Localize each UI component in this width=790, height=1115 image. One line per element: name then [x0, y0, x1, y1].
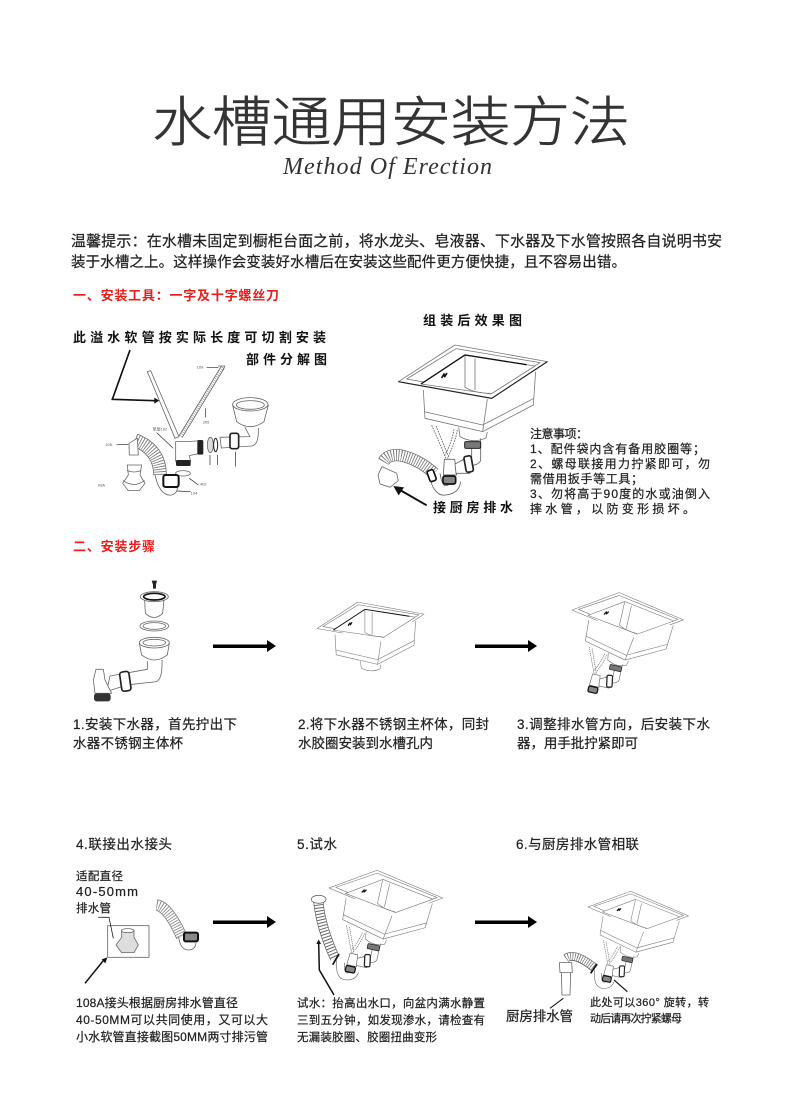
intro text [71, 233, 722, 271]
notes: 注意事项： [530, 426, 588, 441]
panel: parts diagram: 402 [200, 481, 207, 486]
notes: 3、勿将高于90度的水或油倒入 [530, 486, 710, 501]
panel: step 6 kitchen connection: 此处可以360° 旋转，转 [590, 995, 709, 1009]
icon: step 2 sink [317, 602, 424, 671]
panel: parts diagram: 109 [197, 365, 204, 370]
panel: step 6 kitchen connection [506, 883, 709, 1025]
panel: step 6 kitchen connection: 厨房排水管 [506, 1009, 573, 1024]
notes: 1、配件袋内含有备用胶圈等； [530, 441, 705, 456]
notes: 2、螺母联接用力拧紧即可，勿 [530, 456, 710, 471]
step 3 text: 3.调整排水管方向，后安装下水 [517, 717, 710, 732]
panel: step 6 kitchen connection: 动后请再次拧紧螺母 [590, 1011, 682, 1025]
intro text: 温馨提示：在水槽未固定到橱柜台面之前，将水龙头、皂液器、下水器及下水管按照各自说明书安 [71, 233, 722, 250]
step 4 text: 108A接头根据厨房排水管直径 [76, 995, 238, 1010]
step 5 text: 三到五分钟，如发现渗水，请检查有 [297, 1013, 485, 1027]
panel: step 4 adapter: 排水管 [76, 901, 111, 915]
step 2 text: 水胶圈安装到水槽孔内 [298, 735, 433, 751]
icon: step 1 drain assembly [93, 581, 169, 701]
notes [530, 426, 710, 516]
panel: step 4 adapter [76, 869, 198, 983]
panel: parts diagram: 此溢水软管按实际长度可切割安装 [73, 330, 326, 345]
step 5 heading: 5.试水 [297, 837, 338, 852]
panel: step 5 water test [310, 861, 445, 997]
step 4 text: 40-50MM可以共同使用，又可以大 [76, 1012, 268, 1027]
icon: step 3 sink with drain [555, 583, 686, 709]
leader arrow [112, 350, 159, 404]
subtitle: Method Of Erection [282, 154, 492, 180]
step 2 text [298, 717, 489, 751]
arrow [393, 486, 427, 505]
panel: parts diagram: 部件分解图 [246, 352, 327, 367]
section heading: steps: 二、安装步骤 [73, 539, 155, 554]
panel: parts diagram: 205 [203, 420, 210, 425]
panel: assembled view: 接厨房排水 [433, 500, 513, 515]
step 6 heading: 6.与厨房排水管相联 [516, 837, 640, 852]
step 2 text: 2.将下水器不锈钢主杯体，同封 [298, 717, 489, 732]
panel: parts diagram: 105 [105, 442, 113, 447]
panel: step 4 adapter: 适配直径 [76, 869, 123, 883]
step 4 text [76, 995, 268, 1044]
section heading: tools: 一、安装工具：一字及十字螺丝刀 [73, 288, 279, 303]
step 1 text [73, 717, 237, 751]
step 1 text: 1.安装下水器，首先拧出下 [73, 717, 237, 732]
step 3 text: 器，用手批拧紧即可 [517, 736, 638, 751]
title: 水槽通用安装方法 [152, 93, 630, 153]
notes: 摔水管，以防变形损坏。 [530, 501, 695, 516]
panel: step 4 adapter: 40-50mm [76, 884, 138, 899]
arrow [213, 640, 276, 652]
panel: assembled view [378, 313, 547, 515]
step 4 text: 小水软管直接截图50MM两寸排污管 [76, 1029, 268, 1044]
notes: 需借用扳手等工具； [530, 472, 643, 486]
arrow [475, 640, 537, 652]
arrow [213, 916, 276, 928]
step 4 heading: 4.联接出水接头 [76, 836, 172, 852]
panel: parts diagram: 08A [98, 483, 105, 488]
arrow [475, 916, 537, 928]
panel: parts diagram [73, 330, 327, 495]
panel: parts diagram: 104 [191, 490, 198, 495]
step 5 text: 试水：抬高出水口，向盆内满水静置 [297, 996, 485, 1010]
step 5 text: 无漏装胶圈、胶圈扭曲变形 [297, 1030, 438, 1044]
panel: parts diagram: 单层102 [153, 426, 168, 432]
intro text: 装于水槽之上。这样操作会变装好水槽后在安装这些配件更方便快捷，且不容易出错。 [71, 254, 626, 271]
step 1 text: 水器不锈钢主体杯 [73, 736, 184, 751]
step 3 text [517, 717, 710, 751]
step 5 text [297, 996, 485, 1044]
panel: assembled view: 组装后效果图 [423, 313, 522, 328]
